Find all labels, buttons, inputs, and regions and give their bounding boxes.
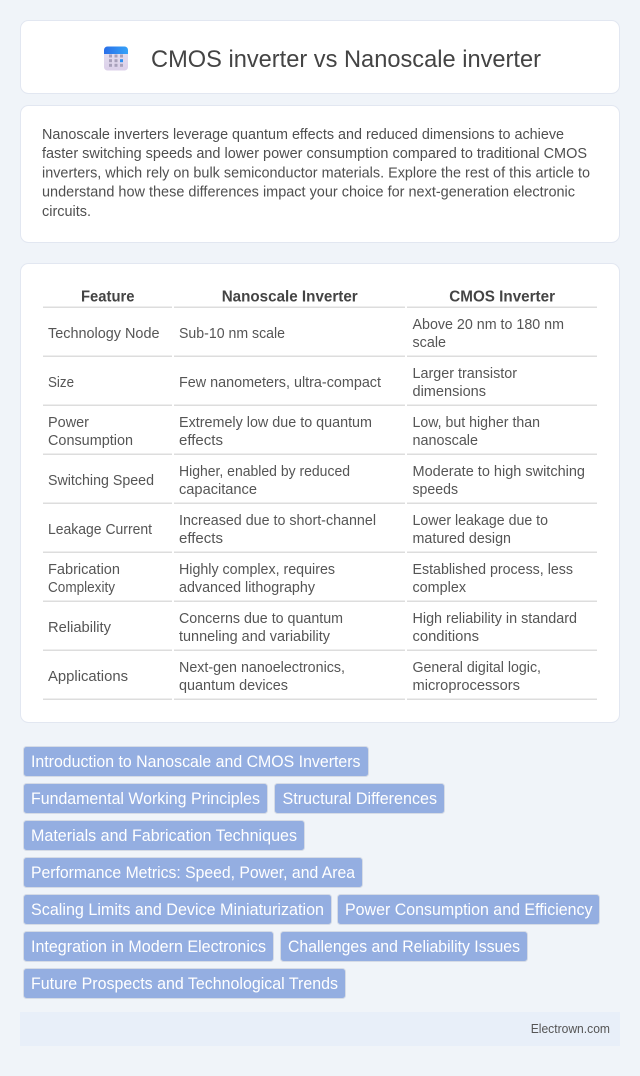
- row: fabrication complexity: advanced lithography: [179, 580, 316, 596]
- row: leakage current: Increased due to short-channel: [179, 513, 376, 529]
- icon: calendar: [104, 46, 128, 70]
- row: technology node: Sub-10 nm scale: [179, 326, 285, 342]
- row: power consumption: Consumption: [48, 433, 133, 449]
- intro paragraph: understand how these differences impact your choice for next-generation electronic: [42, 184, 575, 200]
- row: switching speed: capacitance: [179, 482, 257, 498]
- row: technology node: [48, 317, 564, 351]
- row: technology node: Above 20 nm to 180 nm: [412, 317, 564, 333]
- tag: scaling limits: [24, 894, 332, 924]
- row: size: dimensions: [412, 384, 486, 400]
- row: switching speed: Switching Speed: [48, 473, 154, 489]
- row: power consumption: nanoscale: [412, 433, 478, 449]
- row: leakage current: matured design: [412, 531, 511, 547]
- row: size: Size: [48, 375, 74, 391]
- row: reliability: tunneling and variability: [179, 629, 331, 645]
- row: power consumption: effects: [179, 433, 223, 449]
- row: switching speed: Higher, enabled by reduced: [179, 464, 350, 480]
- row: reliability: conditions: [412, 629, 479, 645]
- intro paragraph: inverters, which rely on bulk semiconductor materials. Explore the rest of this article to: [42, 164, 590, 182]
- tag: materials and fabrication: Materials and Fabrication Techniques: [31, 826, 297, 845]
- row: leakage current: Lower leakage due to: [412, 513, 548, 529]
- tag: challenges: [280, 932, 528, 962]
- tag: performance metrics: Performance Metrics: Speed, Power, and Area: [31, 863, 356, 882]
- row: leakage current: Leakage Current: [48, 522, 152, 538]
- tag: introduction: Introduction to Nanoscale and CMOS Inverters: [31, 752, 360, 771]
- tag: materials and fabrication: [24, 820, 304, 850]
- row: fabrication complexity: Fabrication: [48, 562, 120, 578]
- row: power consumption: Extremely low due to quantum: [179, 415, 372, 431]
- tag: integration: Integration in Modern Electronics: [31, 937, 266, 956]
- table header row: [81, 288, 555, 306]
- row: switching speed: [48, 464, 585, 498]
- row: reliability: High reliability in standard: [412, 611, 577, 627]
- tag: power consumption: Power Consumption and Efficiency: [345, 900, 593, 919]
- row: power consumption: [48, 415, 540, 449]
- row: applications: General digital logic,: [412, 660, 541, 676]
- panel: topic tags: [24, 746, 600, 998]
- row: applications: [48, 660, 541, 694]
- row: size: Few nanometers, ultra-compact: [179, 375, 381, 391]
- row: size: Larger transistor: [412, 366, 517, 382]
- panel: comparison table: [20, 264, 620, 722]
- footer: [20, 1012, 620, 1046]
- row: applications: quantum devices: [179, 678, 288, 694]
- tag: structural differences: [274, 784, 444, 814]
- tag: power consumption: [338, 894, 600, 924]
- row: fabrication complexity: [48, 562, 573, 596]
- row: switching speed: speeds: [412, 482, 458, 498]
- row: reliability: [48, 611, 577, 645]
- tag: challenges: Challenges and Reliability Issues: [288, 937, 520, 956]
- intro paragraph: faster switching speeds and lower power consumption compared to traditional CMOS: [42, 145, 587, 162]
- table header row: Feature: [81, 288, 135, 306]
- row: reliability: Concerns due to quantum: [179, 611, 343, 627]
- row: applications: Next-gen nanoelectronics,: [179, 660, 345, 676]
- row: reliability: Reliability: [48, 620, 112, 636]
- table header row: CMOS Inverter: [449, 288, 555, 306]
- tag: integration: [24, 932, 274, 962]
- tag: scaling limits: Scaling Limits and Device Miniaturization: [31, 900, 324, 919]
- tag: working principles: [24, 784, 268, 814]
- tag: performance metrics: [24, 858, 362, 888]
- row: applications: Applications: [48, 669, 128, 685]
- intro paragraph: circuits.: [42, 203, 91, 220]
- row: fabrication complexity: Complexity: [48, 580, 116, 596]
- title: CMOS inverter vs Nanoscale inverter: [151, 46, 541, 73]
- tag: introduction: [24, 746, 368, 776]
- tag: working principles: Fundamental Working Principles: [31, 789, 260, 808]
- row: fabrication complexity: Established process, less: [412, 562, 573, 578]
- tag: future prospects: [24, 968, 346, 998]
- row: power consumption: Power: [48, 415, 89, 431]
- row: applications: microprocessors: [412, 678, 520, 694]
- table header row: Nanoscale Inverter: [222, 288, 358, 306]
- row: technology node: scale: [412, 335, 446, 351]
- row: size: [48, 366, 517, 400]
- row: fabrication complexity: complex: [412, 580, 467, 596]
- row: switching speed: Moderate to high switching: [412, 464, 585, 480]
- row: leakage current: effects: [179, 531, 223, 547]
- tag: future prospects: Future Prospects and Technological Trends: [31, 974, 338, 993]
- intro paragraph: [42, 126, 590, 220]
- tag: structural differences: Structural Differences: [282, 789, 437, 808]
- intro paragraph: Nanoscale inverters leverage quantum effects and reduced dimensions to achieve: [42, 126, 564, 143]
- row: power consumption: Low, but higher than: [412, 415, 540, 431]
- footer: Electrown.com: [531, 1021, 610, 1036]
- row: fabrication complexity: Highly complex, requires: [179, 562, 335, 578]
- panel: introduction text: [20, 106, 620, 242]
- row: leakage current: [48, 513, 548, 547]
- row: technology node: Technology Node: [48, 326, 160, 342]
- panel: title header: [20, 20, 620, 94]
